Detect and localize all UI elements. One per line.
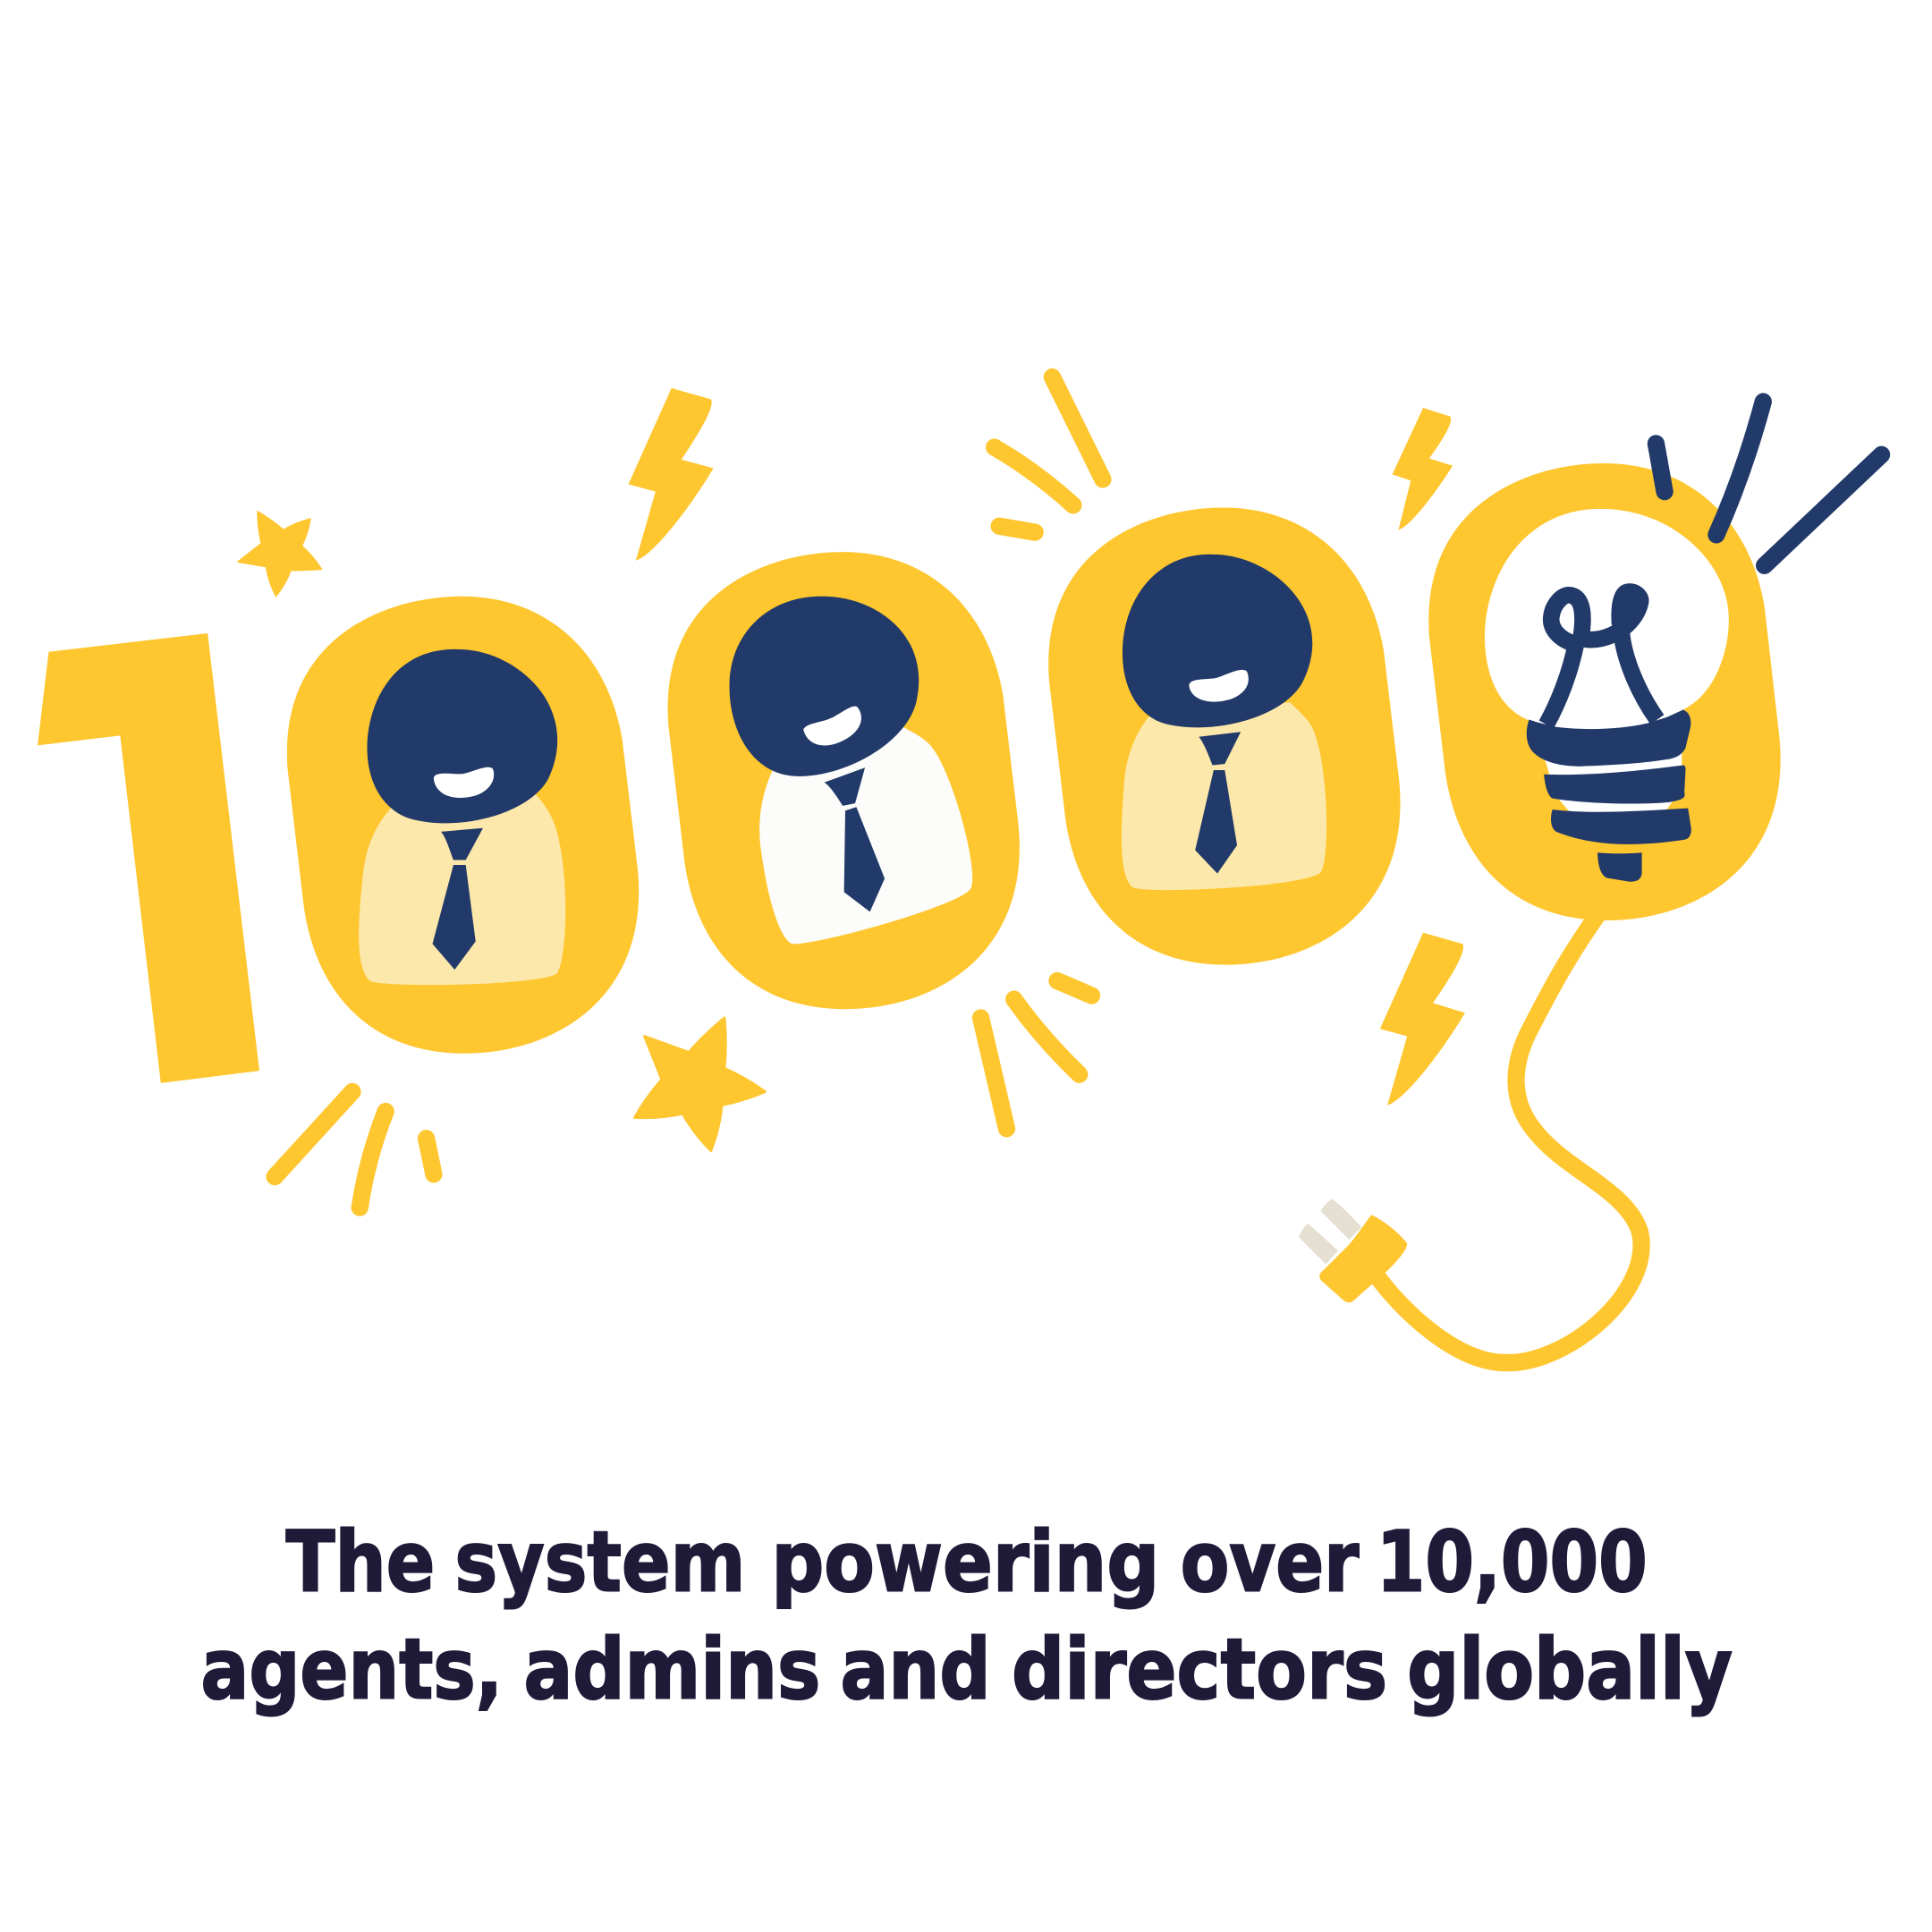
plug [1299,1199,1407,1302]
director tie [1195,732,1241,874]
lightning bolt top left [629,388,714,561]
third zero with director [1048,508,1401,965]
plug body [1319,1215,1407,1302]
director smile [1189,670,1249,702]
director head [1123,555,1312,727]
agent head [368,649,557,823]
caption: agents, [201,1621,503,1718]
admin head [730,597,919,776]
lightning bolt lower right [1380,933,1465,1106]
caption: over [1181,1513,1359,1611]
caption: directors [1012,1621,1387,1718]
caption [201,1513,1733,1718]
caption: powering [771,1513,1159,1611]
fourth zero as light bulb [1428,463,1781,920]
agent body [359,789,565,985]
caption: The [286,1513,435,1611]
caption: admins [523,1621,820,1718]
power cord [1377,905,1641,1363]
agent smile [434,767,494,798]
first zero with agent [287,597,639,1054]
small star [238,512,322,597]
digit one [38,633,259,1083]
admin body [759,727,972,944]
bulb glass [1485,509,1729,817]
plug prongs [1299,1199,1361,1264]
spark lines top middle [995,377,1103,532]
agent tie [433,828,483,970]
bulb base stripes [1527,709,1691,882]
lightning bolt top right [1393,408,1453,530]
caption: globally [1407,1621,1733,1718]
director body [1122,702,1326,890]
spark lines bottom middle [981,981,1092,1129]
spark lines lower left [275,1092,434,1208]
caption: system [454,1513,745,1611]
admin tie [825,767,885,911]
second zero with admin [668,552,1020,1009]
bulb filament [1546,583,1657,724]
caption: 10,000 [1377,1513,1648,1611]
bulb rays [1656,402,1882,565]
caption: and [840,1621,991,1718]
large star [634,1018,765,1151]
admin smile [803,707,861,745]
